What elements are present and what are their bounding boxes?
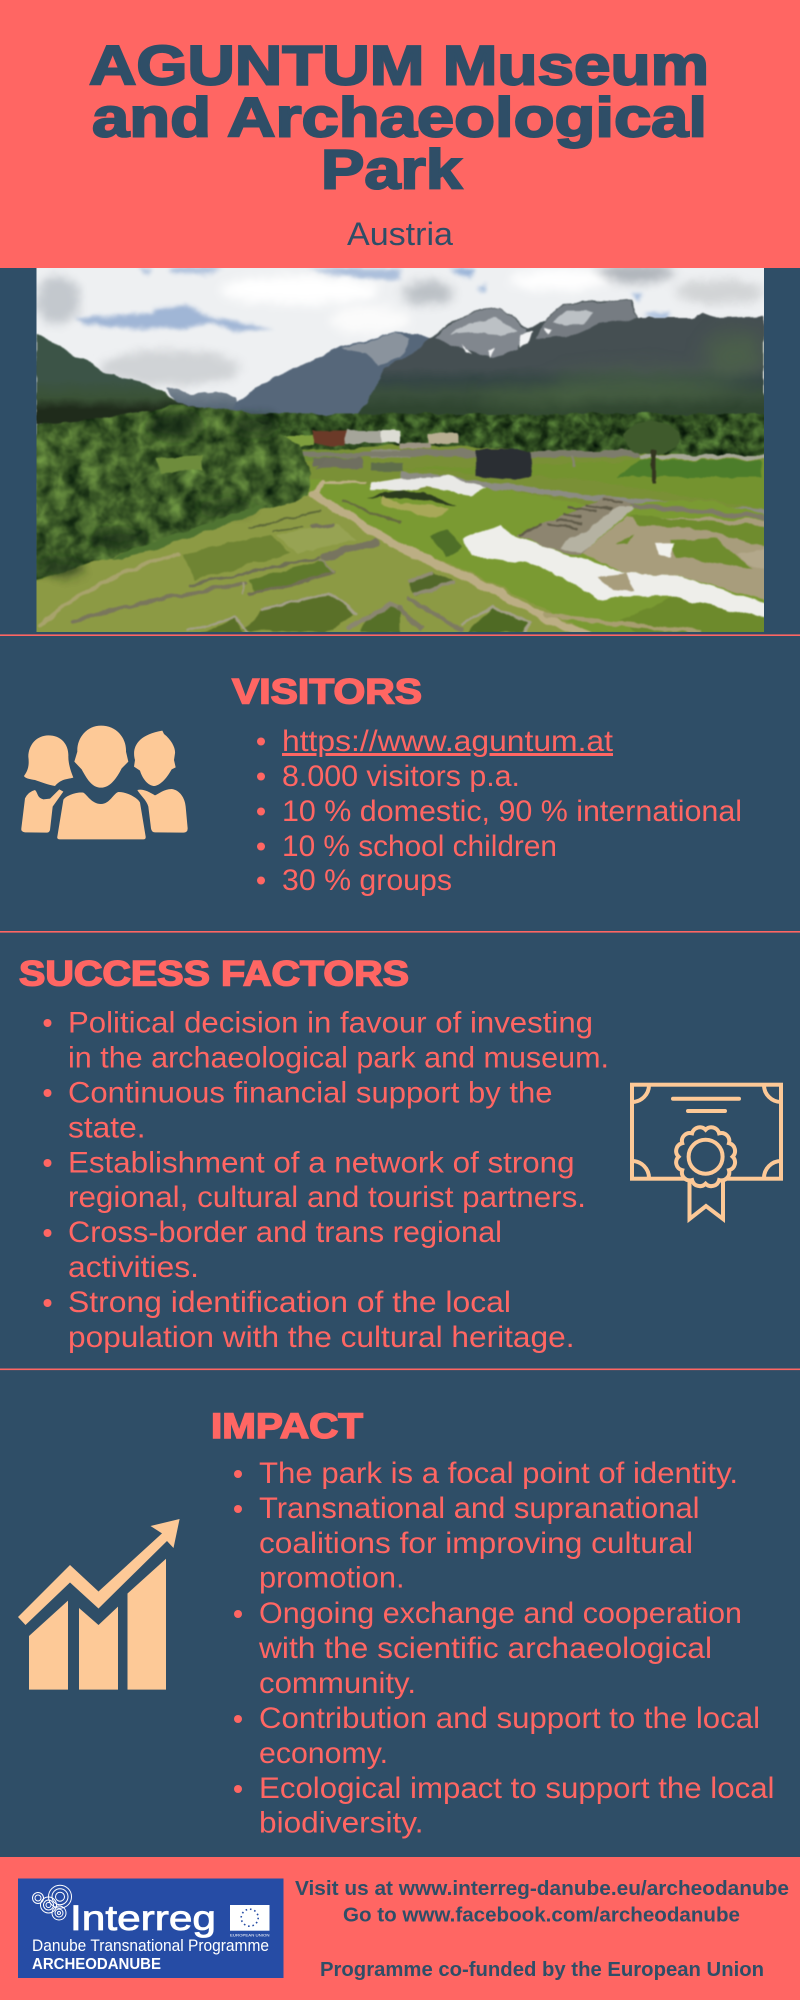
title: and Archaeological (92, 86, 707, 149)
list: visitor facts: 8.000 visitors p.a. (282, 760, 520, 793)
list: visitor facts: 10 % domestic, 90 % international (282, 795, 742, 828)
list: impact: economy. (259, 1737, 388, 1770)
contact text (295, 1877, 789, 1981)
list: impact: promotion. (259, 1562, 405, 1595)
list: visitor facts: 30 % groups (282, 864, 452, 897)
divider (0, 634, 800, 636)
icon: EU flag (230, 1905, 270, 1938)
logo: Interreg Danube Transnational Programme: Danube Transnational Programme (32, 1937, 269, 1955)
left mountain (36, 333, 196, 426)
list: success factors (44, 1007, 609, 1354)
tree line (225, 414, 770, 460)
list: success factors: regional, cultural and tourist partners. (68, 1181, 586, 1214)
contact text: Programme co-funded by the European Union (320, 1958, 764, 1981)
right meadow (400, 458, 770, 510)
list: impact: Ecological impact to support the local (259, 1772, 774, 1805)
far mountains (164, 333, 436, 418)
list: success factors: Political decision in favour of investing (68, 1007, 593, 1040)
list: impact: coalitions for improving cultural (259, 1527, 693, 1560)
logo: Interreg Danube Transnational Programme: ARCHEODANUBE (32, 1956, 161, 1973)
list: visitor facts (257, 725, 742, 897)
subtitle: Austria: Austria (347, 216, 453, 252)
logo: Interreg Danube Transnational Programme (18, 1878, 284, 1978)
heading: visitors: VISITORS (232, 673, 422, 712)
list: impact: Ongoing exchange and cooperation (259, 1597, 742, 1630)
title (89, 34, 709, 201)
contact text: Go to www.facebook.com/archeodanube (343, 1904, 740, 1927)
list: impact: community. (259, 1667, 416, 1700)
heading: success factors: SUCCESS FACTORS (19, 954, 409, 993)
list: visitor facts: 10 % school children (282, 830, 557, 863)
title: Park (321, 138, 463, 201)
field below the road (30, 495, 590, 640)
main mountain (357, 300, 764, 421)
list: impact: The park is a focal point of identity. (259, 1457, 738, 1490)
photo: aerial view of the archaeological park (36, 268, 764, 632)
forest (36, 404, 312, 580)
list: success factors: Continuous financial support by the (68, 1076, 552, 1110)
road and lower-right ruins (314, 495, 700, 640)
list: success factors: state. (68, 1111, 146, 1144)
icon: EU flag: EUROPEAN UNION (230, 1933, 270, 1938)
list: success factors: population with the cultural heritage. (68, 1321, 574, 1354)
logo: Interreg Danube Transnational Programme: Interreg (70, 1899, 216, 1938)
icon: group of people (21, 726, 188, 839)
panel: header (0, 0, 800, 268)
list: impact: Transnational and supranational (259, 1492, 700, 1525)
list: success factors: Establishment of a network of strong (68, 1146, 574, 1179)
icon: growth chart with arrow (18, 1519, 180, 1690)
heading: impact: IMPACT (211, 1407, 363, 1446)
panel: success factors (19, 954, 781, 1354)
excavation, zoom-right coordinates (367, 477, 767, 635)
panel: impact (18, 1407, 774, 1840)
icon: certificate (632, 1085, 781, 1219)
contact text: Visit us at www.interreg-danube.eu/archeodanube (295, 1877, 789, 1900)
list: impact: with the scientific archaeological (258, 1632, 712, 1665)
list: success factors: Cross-border and trans regional (68, 1216, 502, 1249)
ruins (39, 457, 400, 633)
list: impact: biodiversity. (259, 1807, 424, 1840)
buildings and mid-ground (284, 434, 315, 448)
sky blue patches (74, 268, 670, 332)
middle and lower ground, single continuous layering (300, 478, 770, 640)
ground base (36, 443, 764, 582)
panel: footer (0, 1857, 800, 2000)
title: AGUNTUM Museum (89, 34, 709, 96)
list: success factors: in the archaeological park and museum. (68, 1042, 609, 1075)
list: success factors: Strong identification of the local (68, 1286, 511, 1319)
icon: swirl circles (32, 1885, 72, 1920)
list: impact: Contribution and support to the local (259, 1702, 760, 1735)
list: success factors: activities. (68, 1251, 199, 1284)
list: impact (234, 1457, 774, 1840)
list: visitor facts: https://www.aguntum.at (282, 725, 614, 758)
panel: visitors (21, 673, 742, 897)
